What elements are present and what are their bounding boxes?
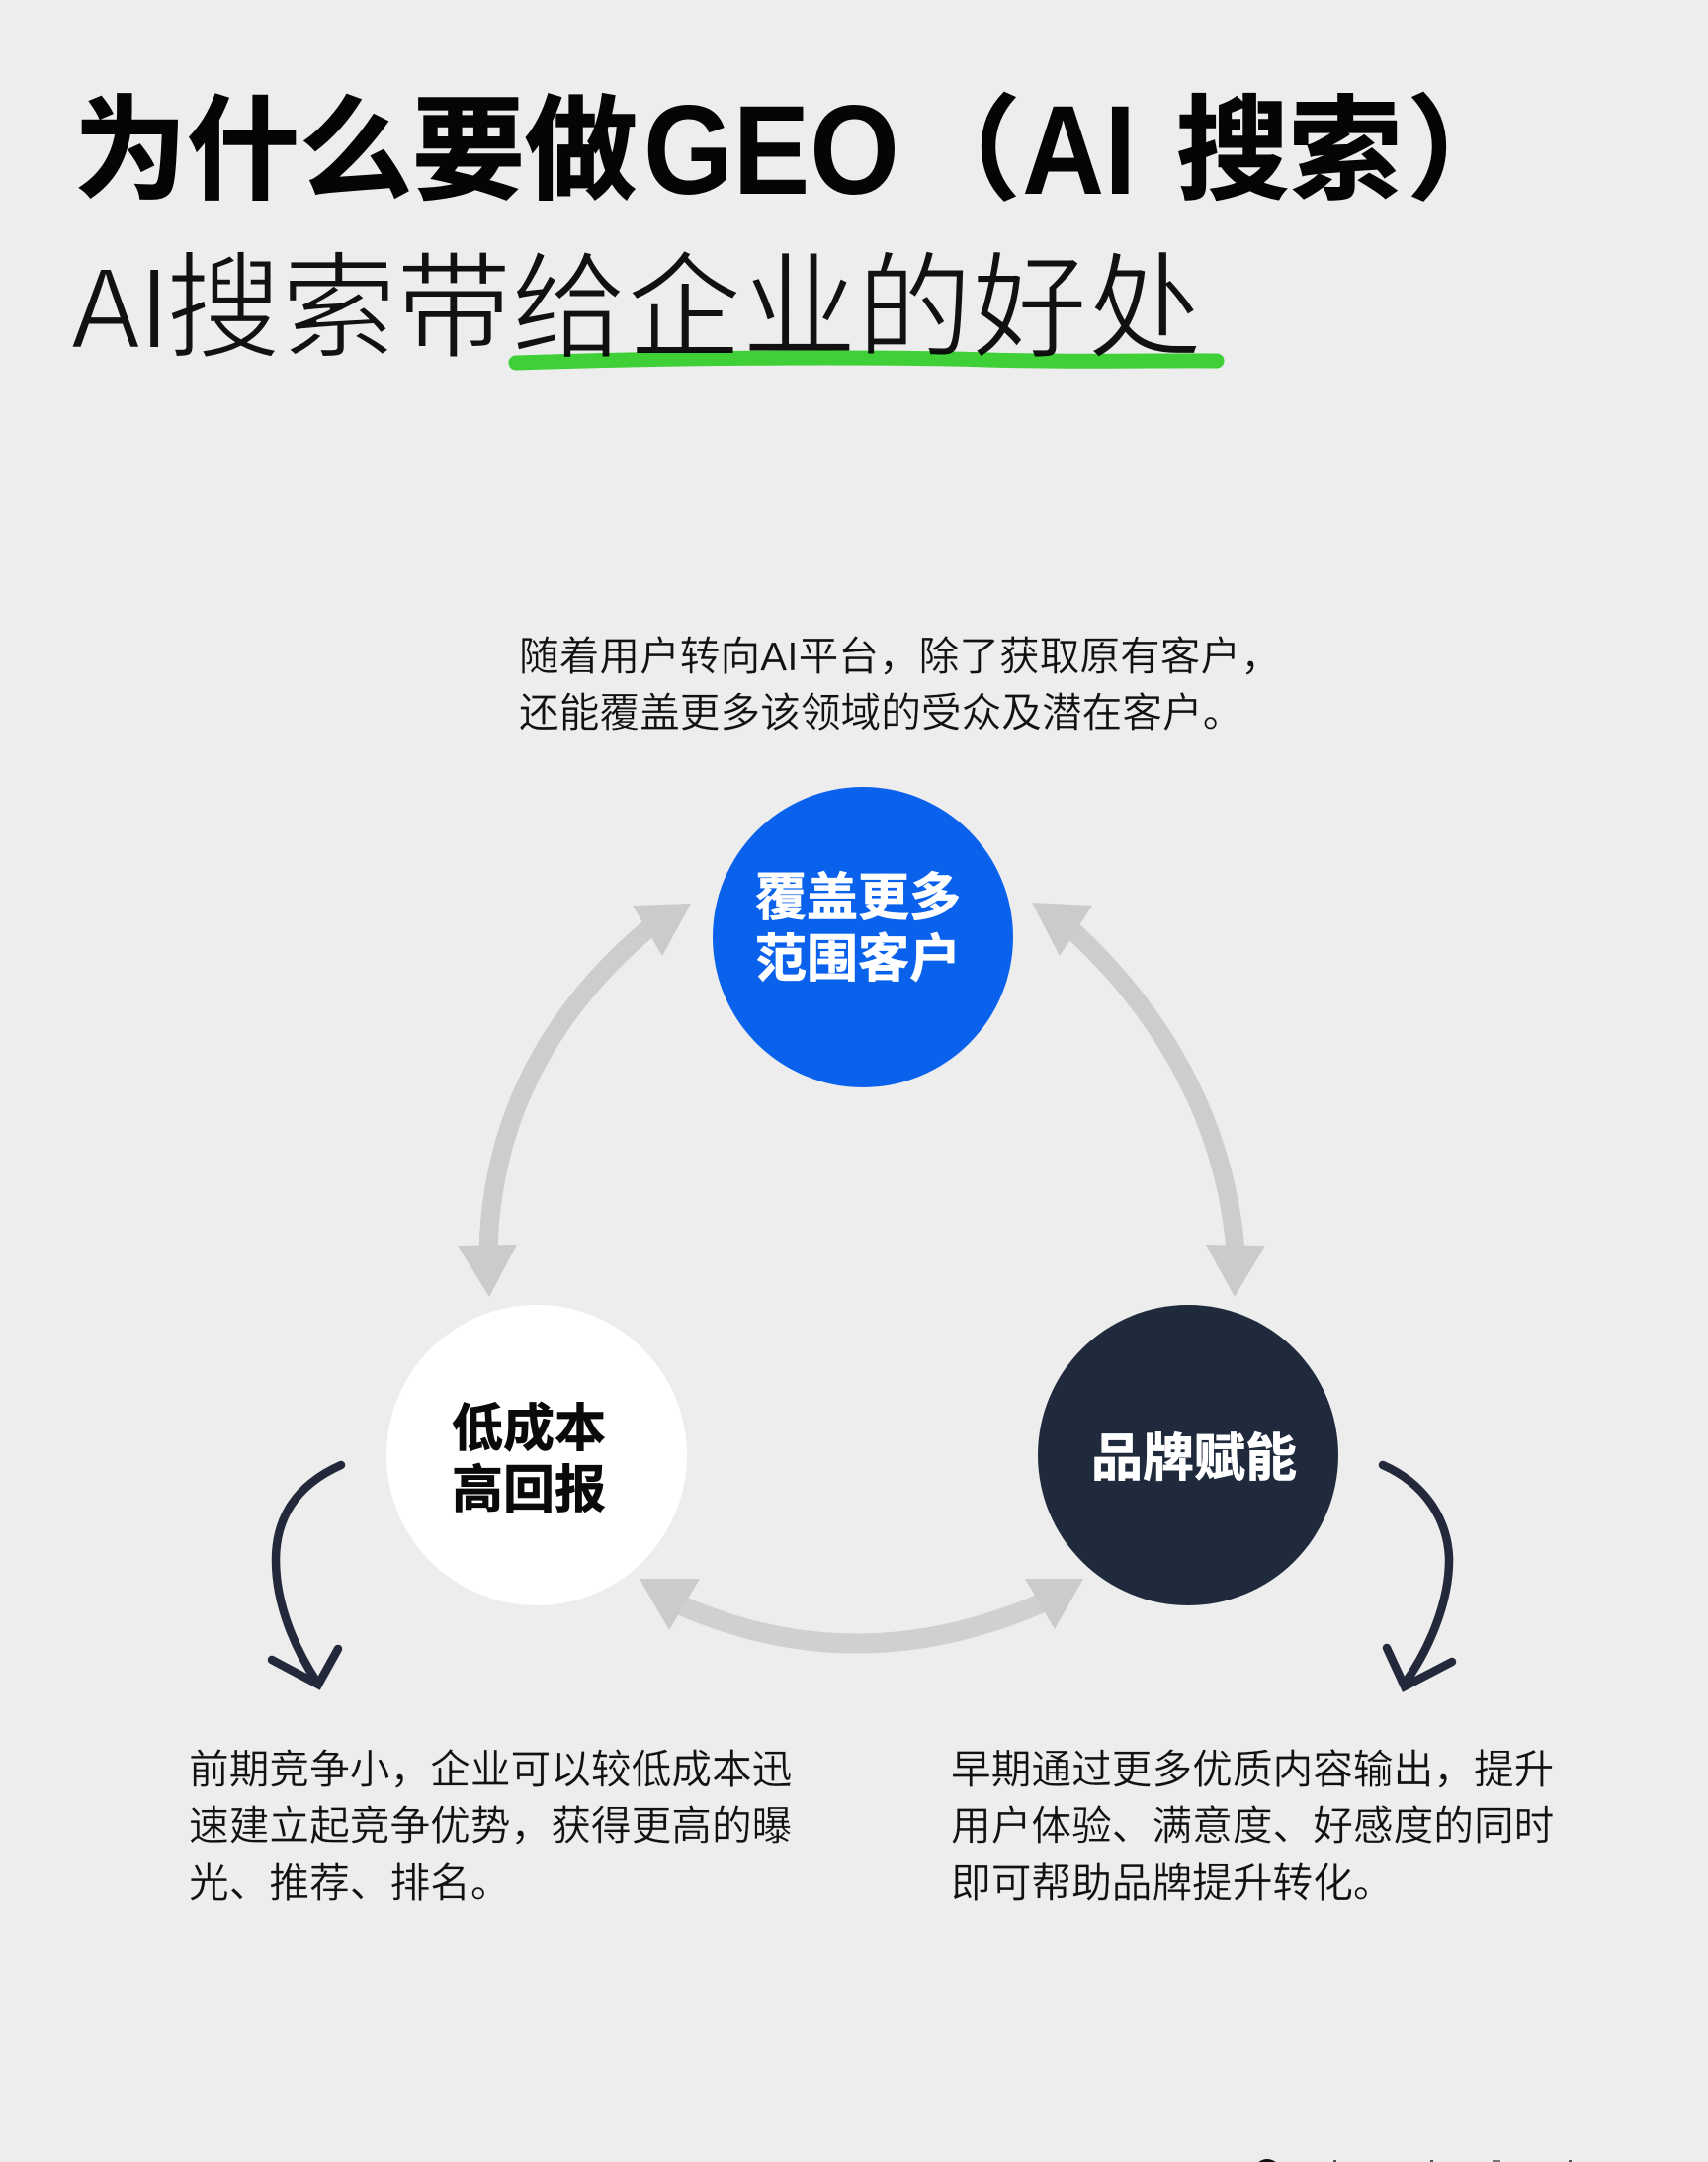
- text block: top description: [519, 634, 1281, 735]
- label: low cost: 高回报: [452, 1462, 606, 1519]
- title: 搜索: [1176, 89, 1402, 215]
- text block: right description: 用户体验、满意度、好感度的同时: [951, 1803, 1554, 1849]
- title: （: [907, 89, 1020, 215]
- arrow: brand to description: [1383, 1465, 1452, 1686]
- green highlight underline: [508, 350, 1224, 370]
- text block: left description: [189, 1747, 792, 1906]
- text block: right description: 早期通过更多优质内容输出，提升: [951, 1747, 1554, 1792]
- label: coverage: 覆盖更多: [755, 870, 961, 927]
- subtitle: AI: [71, 244, 169, 373]
- title: 为什么要做: [74, 89, 638, 215]
- title: GEO: [643, 80, 899, 221]
- subtitle: 搜索带给企业的好处: [166, 244, 1202, 373]
- label: coverage: [755, 870, 961, 989]
- label: low cost: 低成本: [452, 1401, 606, 1458]
- label: brand: 品牌赋能: [1091, 1430, 1297, 1488]
- title: AI: [1022, 80, 1136, 221]
- circle: coverage: [713, 787, 1013, 1087]
- label: coverage: 范围客户: [755, 931, 961, 989]
- circle: low cost: [386, 1305, 687, 1605]
- text block: right description: 即可帮助品牌提升转化。: [951, 1860, 1394, 1906]
- text block: top description: 还能覆盖更多该领域的受众及潜在客户。: [519, 690, 1242, 735]
- text block: left description: 速建立起竞争优势，获得更高的曝: [189, 1803, 792, 1849]
- text block: left description: 光、推荐、排名。: [189, 1860, 511, 1906]
- label: low cost: [452, 1401, 606, 1519]
- arrow: coverage to low cost: [458, 904, 691, 1297]
- arrow: low cost to brand: [640, 1579, 1083, 1644]
- text block: top description: 随着用户转向AI平台，除了获取原有客户，: [519, 634, 1281, 679]
- circle: brand: [1038, 1305, 1338, 1605]
- title: ）: [1408, 89, 1520, 215]
- arrow: coverage to brand: [1032, 903, 1265, 1297]
- text block: right description: [951, 1747, 1554, 1906]
- arrow: low cost to description: [272, 1465, 341, 1685]
- text block: left description: 前期竞争小，企业可以较低成本迅: [189, 1747, 792, 1792]
- title: [74, 80, 1520, 221]
